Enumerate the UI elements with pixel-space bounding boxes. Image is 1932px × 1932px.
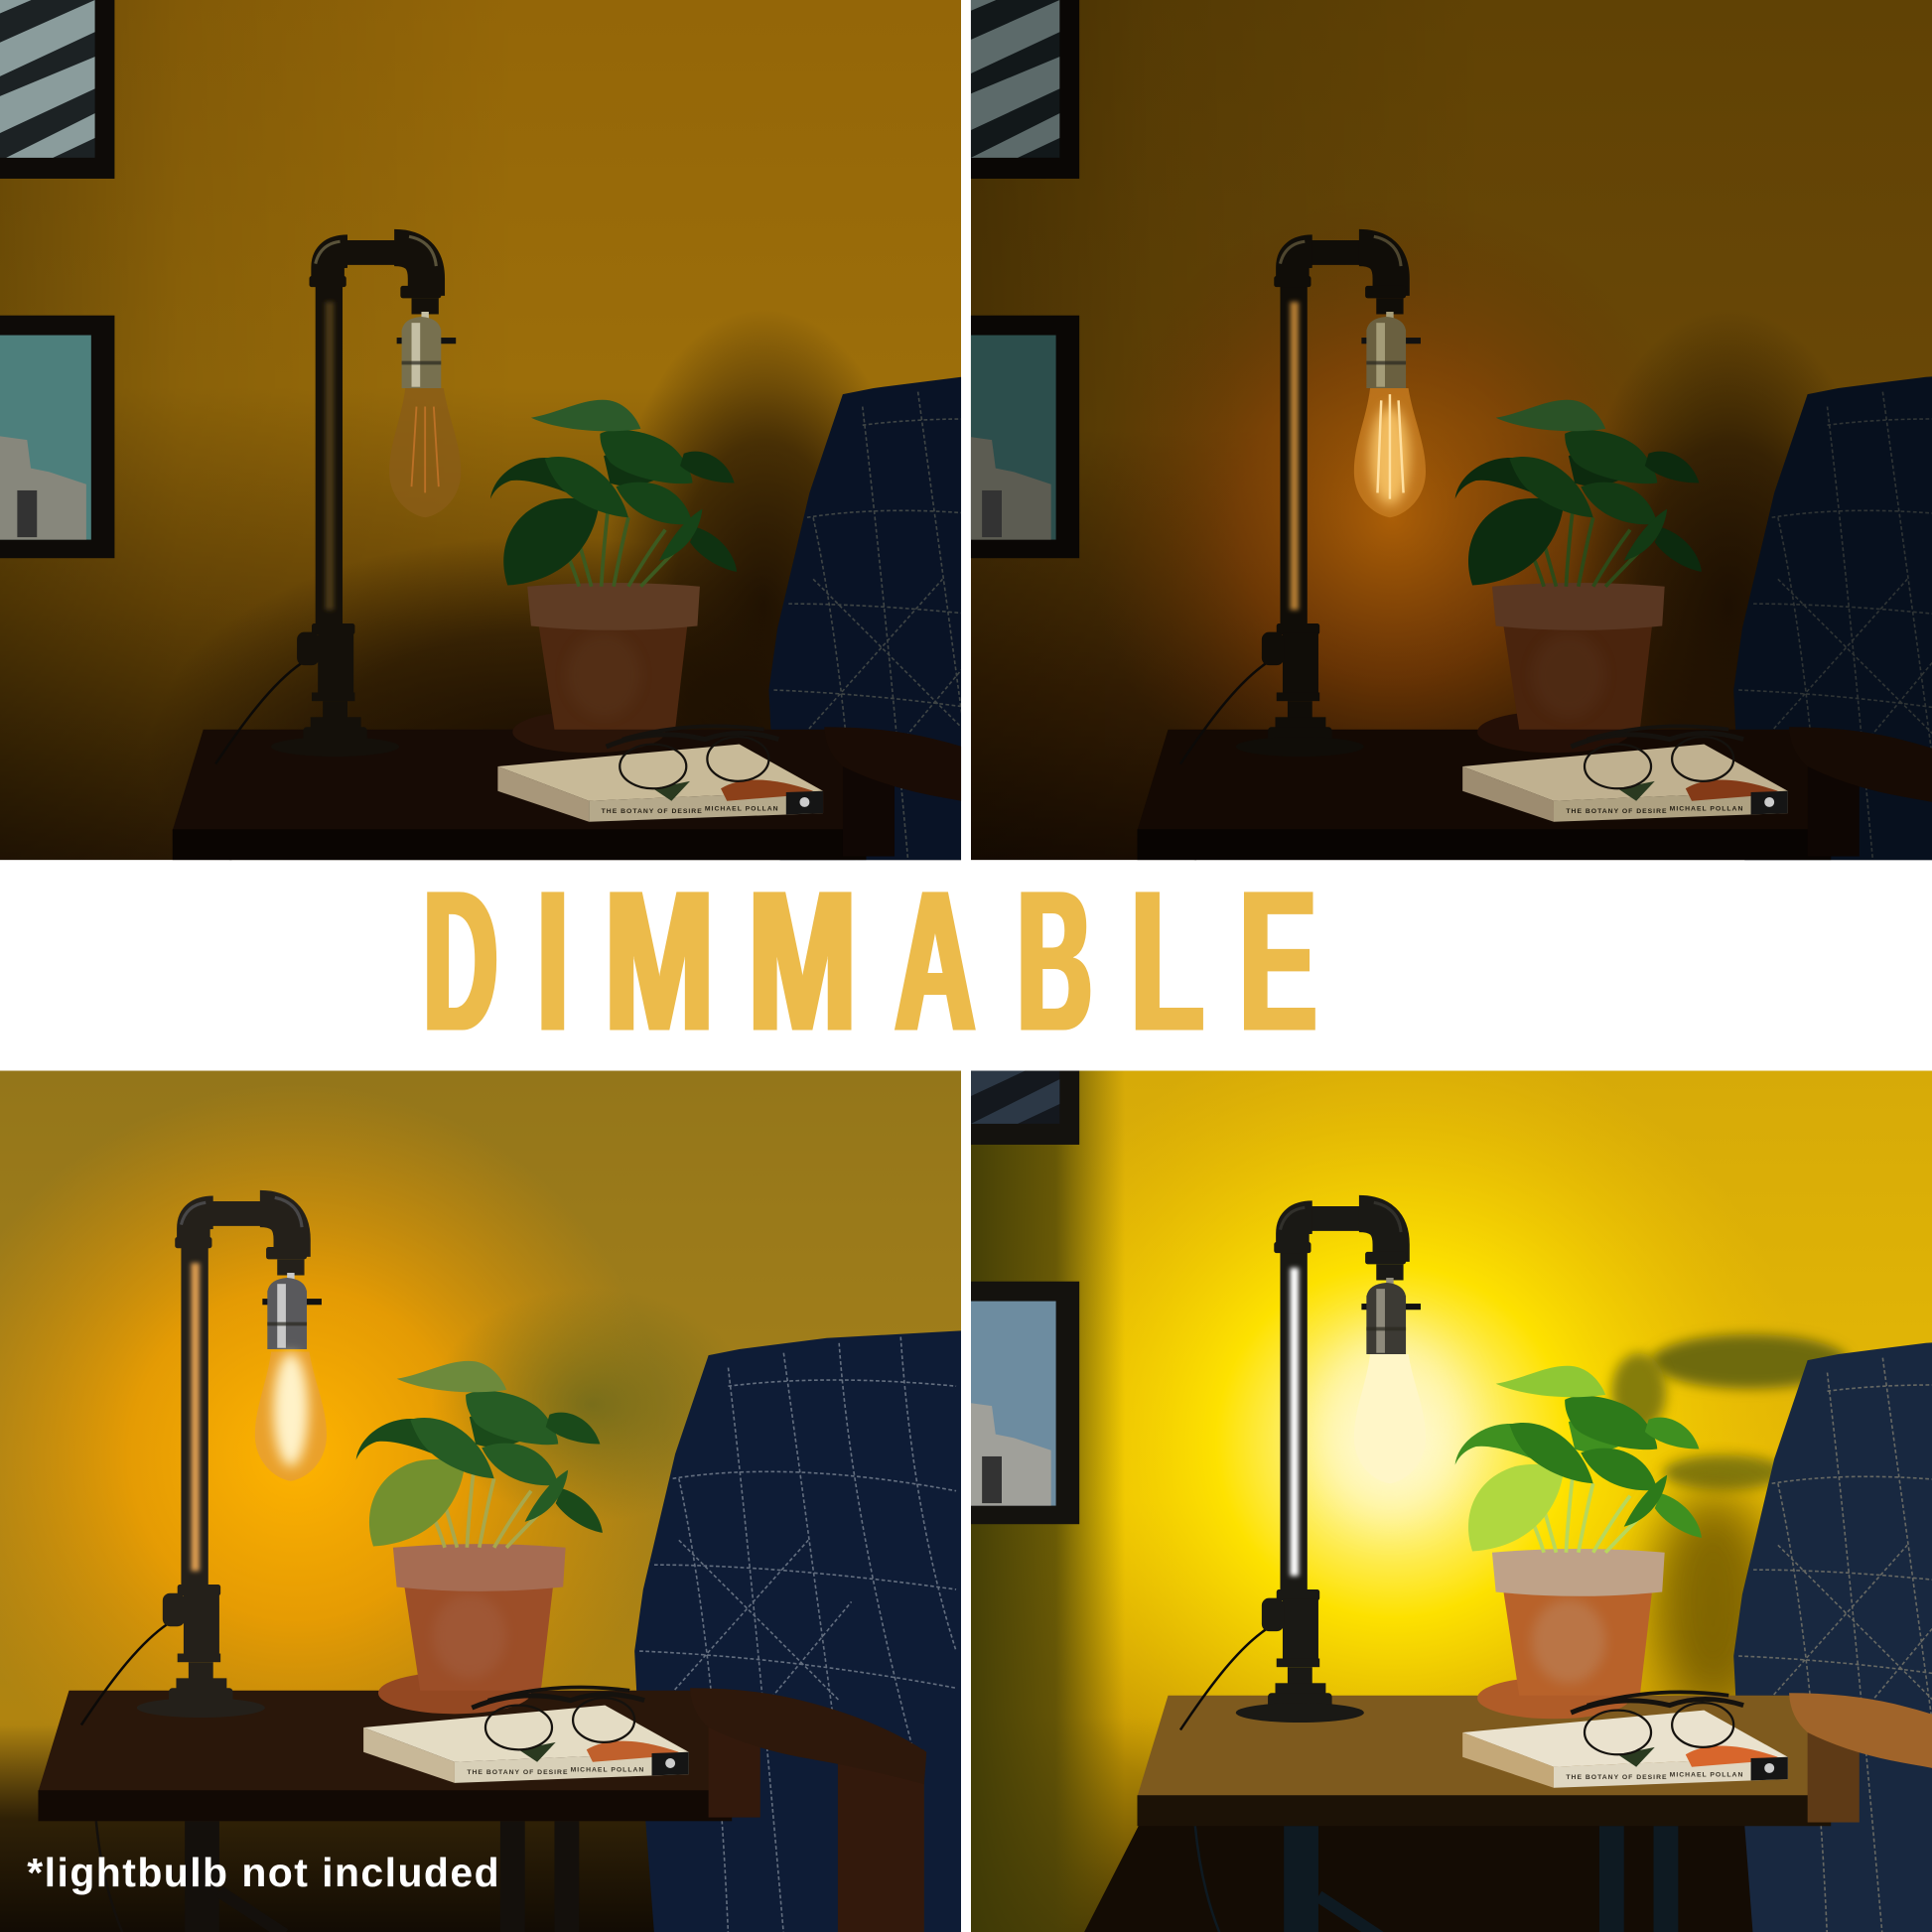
title: L — [1131, 850, 1203, 1073]
chair blanket — [1733, 369, 1932, 973]
chair arm — [1789, 1693, 1932, 1932]
wall with faint glow — [971, 0, 1932, 899]
chair arm — [1789, 727, 1932, 986]
title: D — [424, 849, 497, 1072]
plant — [1455, 400, 1702, 587]
scene — [38, 1197, 961, 1932]
title: M — [749, 850, 857, 1073]
panel: lamp medium, bottom left — [0, 1070, 961, 1932]
light bulb, full — [1354, 1354, 1426, 1483]
glasses — [472, 1687, 644, 1749]
light bulb, medium — [255, 1351, 327, 1481]
lamp — [215, 236, 456, 763]
picture frames — [817, 0, 1079, 558]
side table — [1138, 1696, 1831, 1932]
title: A — [896, 848, 975, 1073]
terracotta pot — [1492, 1549, 1665, 1696]
lamp — [1180, 1202, 1421, 1729]
saucer — [378, 1672, 531, 1714]
picture frames — [817, 916, 1079, 1524]
saucer — [1477, 1677, 1630, 1719]
chair blanket — [1733, 1335, 1932, 1932]
panel: lamp off, top left — [0, 0, 961, 860]
plant — [1455, 1366, 1702, 1553]
scene — [817, 0, 1932, 986]
title: M — [605, 849, 714, 1073]
book — [1462, 745, 1788, 822]
terracotta pot — [527, 583, 700, 730]
wall with amber glow — [0, 1070, 961, 1932]
glasses — [607, 726, 778, 788]
chair blanket — [768, 377, 961, 860]
title: B — [1018, 850, 1092, 1074]
chair arm — [690, 1688, 926, 1932]
plant — [490, 400, 737, 587]
side table — [173, 729, 866, 860]
book — [1462, 1711, 1788, 1788]
title: I — [538, 850, 568, 1073]
wall with bright glow — [971, 1023, 1932, 1932]
saucer — [512, 724, 665, 753]
bulb glow — [1322, 1329, 1457, 1514]
title — [424, 848, 1316, 1074]
footnote: *lightbulb not included — [27, 1850, 499, 1895]
lamp — [81, 1197, 322, 1725]
light bulb, off — [389, 388, 461, 517]
scene — [817, 916, 1932, 1932]
saucer — [1477, 711, 1630, 753]
side table — [38, 1691, 732, 1932]
book — [497, 745, 823, 822]
title: E — [1240, 849, 1316, 1073]
glasses — [1571, 726, 1743, 788]
terracotta pot — [393, 1544, 566, 1691]
picture frames — [0, 0, 114, 558]
terracotta pot — [1492, 583, 1665, 730]
panel: lamp full, bottom right — [817, 916, 1932, 1932]
wall — [0, 0, 961, 860]
panel: lamp dim, top right — [817, 0, 1932, 986]
chair blanket — [634, 1330, 961, 1932]
side table — [1138, 730, 1831, 983]
chair arm — [824, 727, 961, 856]
plant — [356, 1361, 603, 1548]
lamp — [1180, 236, 1421, 763]
book — [363, 1706, 689, 1783]
light bulb, dim — [1354, 388, 1426, 517]
glasses — [1571, 1692, 1743, 1754]
